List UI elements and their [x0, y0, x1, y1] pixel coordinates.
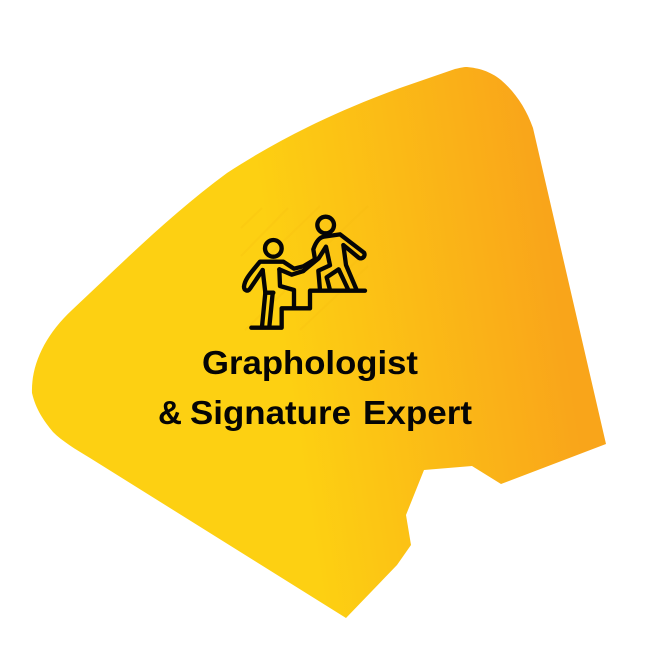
heading — [158, 344, 472, 431]
icon: stairs — [251, 291, 365, 328]
yellow blob background — [32, 67, 606, 618]
heading line 2: Signature — [190, 394, 351, 431]
icon: right person — [303, 217, 365, 290]
heading line 2: & — [158, 394, 182, 431]
faint diagonal stripes behind icon — [241, 206, 368, 330]
icon: two people climbing stairs — [244, 217, 365, 328]
heading line 2: Expert — [363, 394, 472, 431]
heading line 1: Graphologist — [202, 344, 418, 381]
icon: left person — [244, 240, 315, 327]
